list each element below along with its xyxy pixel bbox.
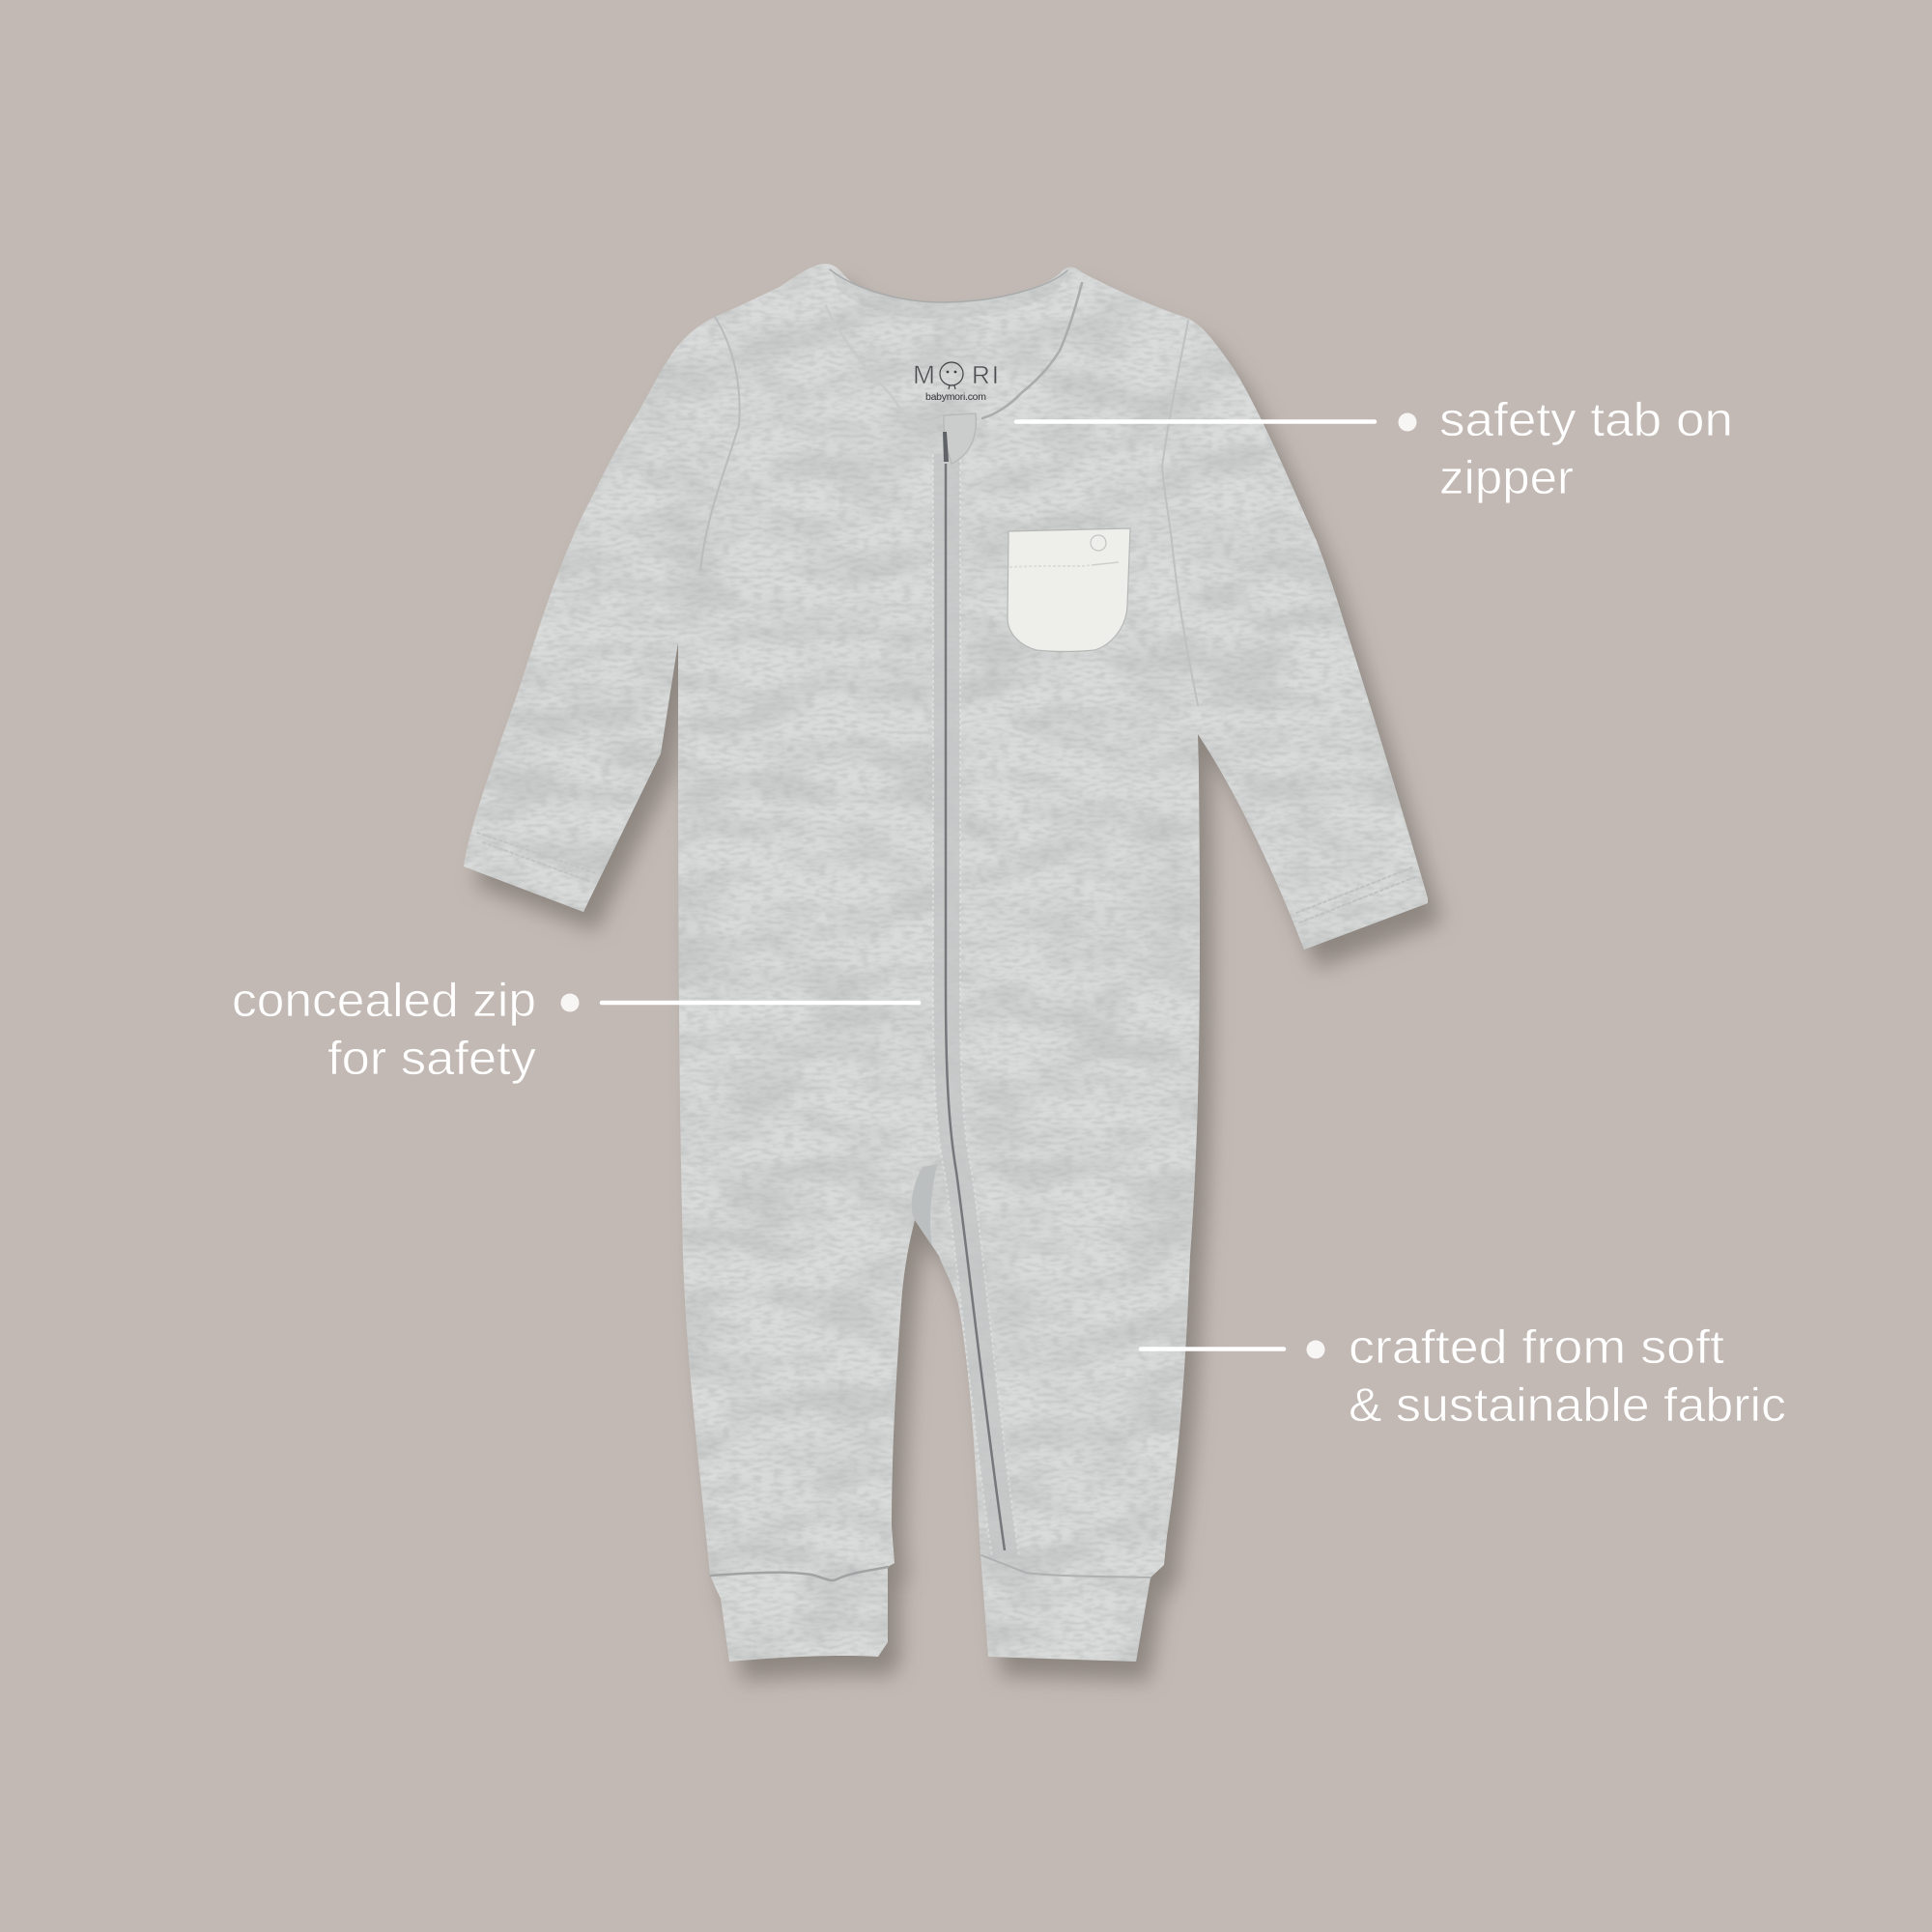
- logo letter M: M: [913, 360, 935, 389]
- callout text: & sustainable fabric: [1349, 1379, 1786, 1432]
- zip slider: [943, 432, 949, 462]
- pocket hem stitching: [1009, 565, 1090, 567]
- concealed zip placket: [933, 454, 1019, 1557]
- crotch shadow fold: [912, 1164, 937, 1246]
- shading in the inner back neck: [833, 272, 1062, 318]
- bullet dot: [1306, 1341, 1325, 1358]
- pocket logo tab: [1091, 535, 1119, 565]
- pocket panel: [1008, 528, 1130, 651]
- leader line: [602, 1001, 919, 1005]
- logo letters RI: RI: [972, 360, 999, 389]
- garment body with heather texture: [454, 256, 1439, 1671]
- zip teeth line: [946, 464, 1005, 1550]
- callout text: zipper: [1439, 452, 1574, 504]
- infographic canvas: [234, 264, 1784, 1690]
- callout text: [232, 975, 537, 1085]
- safety tab at top of zip: [944, 413, 976, 464]
- leader line: [1141, 1347, 1284, 1351]
- callout text: concealed zip: [232, 975, 536, 1027]
- bullet dot: [560, 993, 580, 1012]
- leader line: [1016, 419, 1375, 424]
- logo smiley face: [940, 362, 963, 389]
- bullet dot: [1399, 413, 1416, 431]
- callout: safety tab on zipper: [1016, 394, 1733, 504]
- callout text: safety tab on: [1439, 394, 1733, 446]
- label web address: babymori.com: [925, 391, 986, 403]
- callout: crafted from soft and sustainable fabric: [1141, 1321, 1786, 1432]
- callout: concealed zip for safety: [232, 975, 919, 1085]
- neck label: MORI logo: [913, 360, 999, 403]
- neck and placket stitching: [477, 270, 1415, 1580]
- callout text: [1439, 394, 1733, 504]
- callout text: crafted from soft: [1349, 1321, 1724, 1374]
- chest pocket: [1008, 528, 1130, 651]
- callout text: for safety: [327, 1033, 537, 1085]
- garment drop shadow: [476, 283, 1440, 1681]
- garment: grey zip-up sleepsuit: [454, 256, 1440, 1681]
- callout text: [1349, 1321, 1786, 1432]
